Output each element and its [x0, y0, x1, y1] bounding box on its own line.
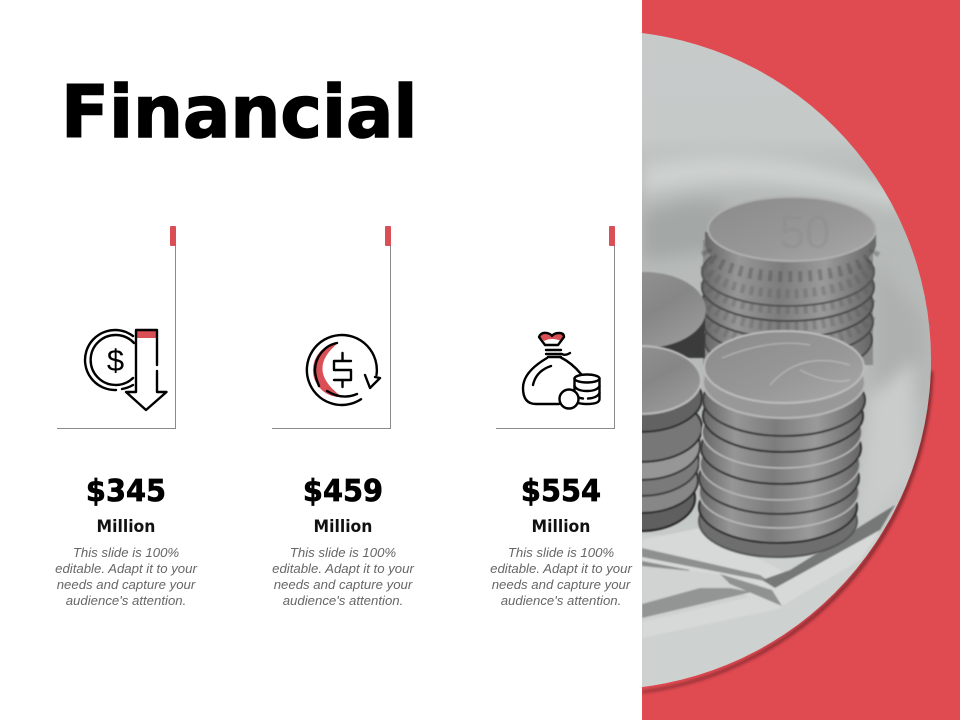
stat 3: This slide is 100%: [508, 545, 614, 560]
stat 3: audience's attention.: [501, 593, 621, 608]
stat 1: editable. Adapt it to your: [55, 561, 197, 576]
stat 3: [490, 474, 632, 608]
left coin stack: [642, 344, 704, 533]
circle shadow: [642, 370, 933, 693]
stat 1: $345: [86, 474, 166, 509]
front coin stack: [699, 331, 865, 557]
panel frame 2: [272, 226, 391, 429]
stat 3: Million: [532, 517, 590, 537]
stat 2: editable. Adapt it to your: [272, 561, 414, 576]
stat 2: Million: [314, 517, 372, 537]
icon: coin with down arrow: [84, 328, 168, 412]
stat 2: needs and capture your: [274, 577, 412, 592]
stat 2: This slide is 100%: [290, 545, 396, 560]
stat 2: audience's attention.: [283, 593, 403, 608]
photo panel: red background with coins in circle: [642, 0, 960, 720]
stat 3: needs and capture your: [492, 577, 630, 592]
back coin stack: [701, 197, 876, 374]
far-left coin stack: [642, 272, 706, 359]
panel frame 3: [496, 226, 615, 429]
stat 1: audience's attention.: [66, 593, 186, 608]
stat 2: [272, 474, 414, 608]
stat 2: $459: [303, 474, 383, 509]
icon: coin with down arrow: $: [107, 343, 124, 378]
banknotes: [642, 505, 895, 687]
icon: money bag with coins: [522, 332, 601, 410]
stat 3: $554: [521, 474, 601, 509]
panel frame 1: [57, 226, 176, 429]
stat 1: [55, 474, 198, 608]
red background: [642, 0, 960, 720]
icon: dollar with circular arrow: [306, 334, 382, 406]
back coin stack: 50: [779, 206, 831, 258]
circular photo of coins: [642, 33, 931, 687]
stat 1: This slide is 100%: [73, 545, 179, 560]
title: Financial: [61, 70, 417, 154]
stat 1: needs and capture your: [57, 577, 195, 592]
stat 3: editable. Adapt it to your: [490, 561, 632, 576]
stat 1: Million: [97, 517, 155, 537]
